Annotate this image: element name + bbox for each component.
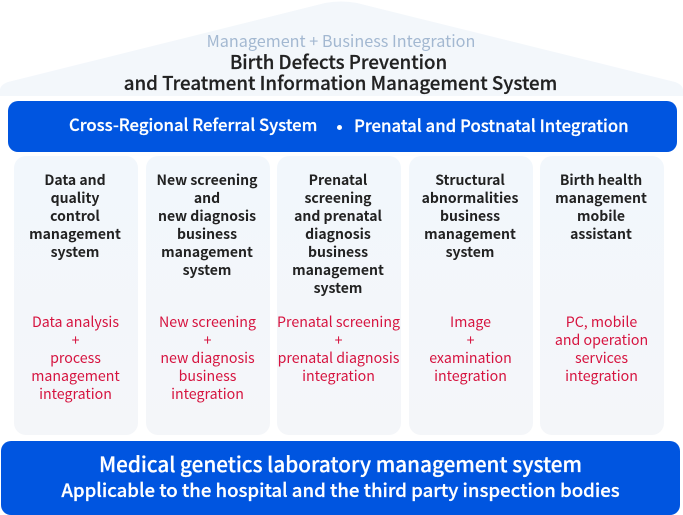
- panel integration text: PC, mobile: [566, 312, 637, 332]
- panel integration text: process: [50, 348, 101, 368]
- panel integration text: +: [72, 330, 79, 350]
- panel heading: management: [29, 224, 121, 244]
- main title: and Treatment Information Management System: [124, 68, 557, 96]
- panel heading: New screening: [157, 170, 257, 190]
- panel: data and quality control: [14, 156, 138, 435]
- panel heading: Prenatal: [309, 170, 367, 190]
- panel heading: system: [51, 242, 99, 262]
- band label: integration: Prenatal and Postnatal Integration: [354, 113, 629, 137]
- panel integration text: new diagnosis: [160, 348, 255, 368]
- panel heading: Birth health: [560, 170, 642, 190]
- top blue band: [8, 101, 677, 152]
- panel integration text: [159, 312, 256, 404]
- panel heading: quality: [51, 188, 99, 208]
- panel heading: system: [314, 278, 362, 298]
- bottom blue band: [1, 441, 680, 515]
- panel heading: management: [555, 188, 647, 208]
- panel integration text: integration: [171, 384, 244, 404]
- bottom band subheading: Applicable to the hospital and the third party inspection bodies: [61, 476, 620, 503]
- panel integration text: examination: [429, 348, 512, 368]
- panel integration text: and operation: [555, 330, 648, 350]
- panel heading: abnormalities: [422, 188, 518, 208]
- panel integration text: [277, 312, 400, 386]
- panel heading: [157, 170, 258, 280]
- panel: structural abnormalities: [409, 156, 533, 435]
- panel heading: [292, 170, 384, 298]
- panel heading: [555, 170, 647, 244]
- panel heading: Structural: [435, 170, 505, 190]
- panel heading: business: [177, 224, 237, 244]
- panel heading: [29, 170, 121, 262]
- panel heading: control: [50, 206, 100, 226]
- panel heading: mobile: [577, 206, 625, 226]
- panel heading: assistant: [570, 224, 632, 244]
- panel integration text: business: [179, 366, 236, 386]
- panel heading: new diagnosis: [158, 206, 256, 226]
- panel integration text: integration: [434, 366, 507, 386]
- roof subtitle: Management + Business Integration: [207, 28, 475, 52]
- panel heading: screening: [304, 188, 372, 208]
- panel integration text: integration: [39, 384, 112, 404]
- panel heading: diagnosis: [305, 224, 371, 244]
- panel heading: business: [308, 242, 368, 262]
- panel integration text: integration: [565, 366, 638, 386]
- panel integration text: +: [335, 330, 342, 350]
- roof shape: [0, 2, 683, 96]
- panel integration text: integration: [302, 366, 375, 386]
- panel integration text: [555, 312, 648, 386]
- panel integration text: management: [31, 366, 120, 386]
- panel heading: management: [424, 224, 516, 244]
- panel integration text: Prenatal screening: [277, 312, 400, 332]
- panel heading: and: [194, 188, 220, 208]
- band label: referral: Cross-Regional Referral System: [69, 112, 317, 136]
- panel integration text: +: [467, 330, 474, 350]
- panel heading: system: [446, 242, 494, 262]
- panel heading: management: [292, 260, 384, 280]
- main title: Birth Defects Prevention: [230, 48, 447, 75]
- panel integration text: prenatal diagnosis: [278, 348, 399, 368]
- panel integration text: [429, 312, 512, 386]
- bottom band heading: Medical genetics laboratory management system: [99, 448, 582, 478]
- panel heading: system: [183, 260, 231, 280]
- panel heading: and prenatal: [294, 206, 382, 226]
- panel: birth health assistant: [540, 156, 664, 435]
- panel integration text: +: [204, 330, 211, 350]
- panel: new screening and new diagnosis: [146, 156, 270, 435]
- panel integration text: Image: [450, 312, 491, 332]
- panel heading: management: [161, 242, 253, 262]
- panel integration text: New screening: [159, 312, 256, 332]
- panel heading: business: [440, 206, 500, 226]
- panel integration text: services: [575, 348, 628, 368]
- main title: [124, 48, 557, 96]
- panel integration text: Data analysis: [32, 312, 119, 332]
- band bullet: [337, 125, 342, 130]
- panel integration text: [31, 312, 120, 404]
- panel: prenatal screening and diagnosis: [277, 156, 401, 435]
- panel heading: Data and: [44, 170, 106, 190]
- panel heading: [422, 170, 518, 262]
